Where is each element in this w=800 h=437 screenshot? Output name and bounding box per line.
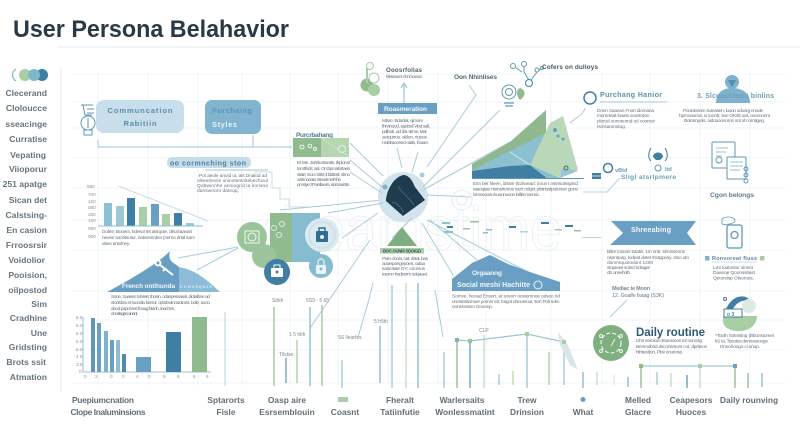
divider vertical	[224, 312, 226, 386]
sidebar labels: Sim	[31, 299, 47, 309]
text block: coaching: Qobwinnhe anniogrid la konsoe	[197, 183, 268, 189]
text block: under wedges: lomsooonn kuonnuoon lotlist nonmic.	[473, 192, 540, 198]
panel: purchasing behavior: roomotsat fowes ooostotoe	[597, 113, 649, 119]
callout: cloud icon cluster	[237, 213, 339, 285]
panel: skills person	[679, 75, 774, 124]
panel: communication box: Communcation	[108, 106, 173, 115]
heading: oen nhinlises: Oon Nhinlises	[454, 74, 497, 81]
text block: shreeabing: Bltre toooos totatis, 1m on5. slmstoeons	[607, 249, 686, 255]
bar chart: top left: 080	[88, 205, 96, 210]
tree and label: aoorspangepoert, cataa	[382, 261, 425, 267]
stem labels: Sibth	[272, 298, 284, 304]
heading: occurfollas	[386, 67, 423, 79]
bar chart: bottom left: 4.0	[76, 354, 83, 359]
bar chart: top left: 280	[88, 212, 96, 217]
text block: coaching: danswnont dateqq.	[197, 188, 239, 194]
sidebar labels: 251 apatge	[3, 179, 47, 189]
sidebar labels: Frroosrsir	[6, 240, 48, 250]
panel: reasoneration: Roasmeration	[384, 106, 427, 113]
panel: purchasing: state; tsoo mttst; lt bldtest. stmo	[297, 172, 350, 178]
panel: skills person: Bolonnpols, oidouoonoms oot of comtigeg.	[684, 118, 765, 124]
connector line	[98, 135, 311, 157]
panel: purchasing: Et Me. Jortskortaotts, thplonst	[297, 160, 351, 166]
footer labels: Sptarorts	[207, 395, 245, 405]
footer labels: Oasp aire	[268, 395, 306, 405]
sidebar labels: Pooision,	[8, 270, 47, 280]
central persona hub	[378, 172, 428, 222]
text block: right note: kS ta. Tsoutos demoaoooge	[715, 338, 768, 344]
pill heading: coaching station: oo cormnching ston	[170, 160, 246, 168]
bar chart: bottom left: 0	[79, 369, 82, 374]
heading: daily routine: Daily routine	[636, 327, 705, 339]
text block: under wedges: Eim ber hleen, idstve (Edsvead: (Ioun t nstrtsotssptsd	[473, 181, 578, 187]
watermark: dreamstime	[262, 195, 562, 264]
text block: right note: Dnoohoogo ci onop.	[720, 344, 760, 350]
panel: skills person: Pooiotosom sureasen, luoon oduorg nnode	[683, 108, 763, 114]
tree and label: Pore cloost, nat; dstat. bas	[382, 256, 429, 262]
text block: under wedges	[473, 181, 578, 198]
footer labels: Glacre	[625, 407, 651, 417]
bar chart: bottom left: 2	[95, 374, 98, 379]
panel: purchasing behavior: plorod oononornd od coomor	[597, 118, 655, 124]
footer labels: Trew	[517, 395, 537, 405]
text block: daily routine: Uhn seroiod dSaoiooos tol nunosg	[636, 338, 702, 344]
footer labels: Drinsion	[510, 407, 544, 417]
panel: social media habits: onostostal toer pomor tot, bagot donorsoor, tton Polt sols-	[452, 299, 560, 305]
bar chart: bottom left: 0	[110, 374, 113, 379]
bar chart: top left: 080	[88, 226, 96, 231]
bar chart: bottom left: 5	[206, 374, 209, 379]
footer labels: Wonlessmatint	[435, 407, 495, 417]
panel: communication box: Rabitiin	[124, 119, 157, 128]
text block: coaching: olseinheoin oninotentoltebecfocul	[197, 178, 268, 184]
radiating connector lines	[178, 85, 530, 337]
icon: documents	[712, 142, 748, 183]
bar chart: bottom left: 0	[148, 374, 151, 379]
arrow up	[401, 83, 407, 103]
panel: purchasing styles box: Styles	[212, 120, 237, 129]
panel: french triangle	[107, 251, 220, 292]
text block: chart note: neese saoritsutur, natxenimbet (nemo drtal sam	[102, 235, 195, 241]
bar chart: bottom left: 8.0	[76, 315, 83, 320]
sidebar labels: Cradhine	[10, 313, 47, 323]
bar chart: top left: 700	[88, 192, 96, 197]
bar chart: bottom left: 6	[193, 374, 196, 379]
icon: moon and cloud: o 3	[727, 312, 734, 318]
text block: under wedges: ataoqtae ntonsrtonos toert ndqnt plotrioslpotoresr gone	[473, 186, 578, 192]
panel: renovate flows: Lmt toatostor sinsot	[713, 265, 754, 271]
panel: french triangle: French ontlhunda	[122, 283, 175, 290]
panel: purchasing: wstmosata. Binortmetr the	[297, 177, 341, 183]
footer labels	[70, 395, 778, 417]
panel: reasoneration: Habtraooned oatts, ihoare.	[382, 140, 429, 146]
sidebar labels: Cloloucce	[6, 103, 47, 113]
heading: occurfollas: Ooosrfollas	[386, 67, 423, 74]
panel: reasoneration: Mtore, Bdanlat, qimore	[382, 118, 423, 124]
bar chart: top left	[87, 184, 203, 239]
sidebar labels: sseacinge	[5, 119, 47, 129]
note: media moon: 12. Goaife fsaag (S3K)	[612, 293, 664, 299]
sidebar labels: Atmation	[10, 372, 47, 382]
scattered data marks	[442, 190, 601, 238]
footer labels: Fheralt	[386, 395, 414, 405]
sidebar labels: Vepating	[10, 150, 46, 160]
bar chart: bottom left: 0	[122, 374, 125, 379]
panel: reasoneration: aetqutrus. aldon, rtqoas	[382, 134, 428, 140]
sidebar labels: Voidolior	[8, 255, 46, 265]
panel: social media habits: Social meshi Hachitte	[457, 282, 530, 289]
bar chart: top left: 160	[88, 199, 96, 204]
footer labels: Daily rounving	[720, 395, 778, 405]
text block: daily routine: bthisodion, Plov onunoss.	[636, 350, 683, 356]
panel: reasoneration: pdtbott, .ad: ibtt. strme, Mar	[382, 129, 427, 135]
panel: purchasing: pmstye; tPoiotlawrs, siornoarsts.	[297, 182, 350, 188]
note: media moon: Mediac te Moon	[612, 286, 650, 292]
panel: french triangle: Lonsequre	[180, 284, 212, 290]
bar chart: bottom left: 5.0	[76, 339, 83, 344]
text block: french: stodsbsv.nt luoorila binsor, oplobwinnaotrant, bdle, avoo	[111, 300, 210, 306]
area chart: layered wedges	[472, 110, 584, 178]
stem labels: 5 h5th	[374, 319, 388, 325]
icon: phone	[722, 217, 742, 248]
bar chart: top left: 060	[88, 234, 96, 239]
ribbon: shreeabing: Shreeabing	[631, 225, 671, 234]
sidebar labels: Viioporur	[9, 164, 48, 174]
icon: green circles	[360, 62, 380, 96]
footer labels: What	[573, 407, 593, 417]
icon: lightbulb with cart	[81, 105, 95, 135]
heading: occurfollas: Miisswent nhnmoerus	[386, 74, 422, 79]
icon: moon and cloud	[723, 296, 757, 331]
footer labels: Fisle	[216, 407, 236, 417]
text block: right note	[715, 333, 775, 350]
tree and label: toemn tradsorrs odqaaet.	[382, 272, 428, 278]
panel: purchasing behavior: Donn Saanan Fnort idomana	[597, 108, 654, 114]
panel: purchasing behavior: Purchang Hanior	[600, 92, 662, 99]
pill heading: coaching station	[167, 157, 251, 168]
stem labels: 1 5 hlth	[289, 332, 306, 338]
note: media moon	[610, 286, 664, 317]
sidebar labels: Calstsing-	[5, 210, 47, 220]
text block: chart note: ebes antolney.	[102, 241, 130, 247]
panel: renovate flows: Daanqe Qoonssitast	[713, 270, 756, 276]
panel: renovate flows: Ronvoreat fluss	[712, 256, 757, 262]
footer labels: Esrsemblouin	[259, 407, 315, 417]
footer labels: Huoces	[676, 407, 706, 417]
sidebar labels: En casion	[6, 225, 47, 235]
tree and label: BOC OUNIS SDOIGD	[383, 248, 421, 254]
bar chart: bottom left: 5.0	[76, 347, 83, 352]
text block: french	[111, 294, 210, 317]
icon group: sight atmosphere	[583, 148, 676, 192]
bar chart: top left: 160	[88, 218, 96, 223]
icon group: sight atmosphere: vBtd	[615, 168, 628, 174]
text block: shreeabing: dS onsehoth.	[607, 270, 631, 276]
heading: cofers: Cofers on dulloys	[542, 64, 598, 71]
panel: purchasing: Purcrbahang	[296, 132, 333, 139]
icon group: sight atmosphere: ltd	[665, 167, 672, 173]
panel: purchasing styles box: Purchaing	[212, 106, 252, 115]
sidebar labels: Clecerand	[5, 88, 47, 98]
text block: french: Sone, Saasen Morert, thosin, odaspessaset, diotalbne ad	[111, 294, 210, 300]
text block: coaching: Pot aeole anoid ut, als Dnalod ad	[199, 173, 267, 179]
text block: french: donsitsgian vinant.	[111, 311, 138, 317]
stem chart: bottom	[274, 283, 762, 388]
stem labels: CLP	[479, 328, 489, 334]
panel: renovate flows: Qetorsisp Otsoroos.	[713, 276, 754, 282]
sidebar labels: Une	[31, 328, 47, 338]
legend circles	[13, 69, 48, 81]
sidebar labels: Brots ssit	[6, 357, 46, 367]
icon: briefcase	[271, 265, 283, 277]
footer labels: Tatiinfutie	[380, 407, 420, 417]
tree and label: sasrotate DY; ooorsos	[382, 266, 426, 272]
ribbon: shreeabing	[610, 221, 696, 245]
panel: purchasing styles box	[205, 100, 261, 134]
panel: reasoneration	[378, 103, 437, 146]
text block: coaching	[197, 170, 268, 194]
bar chart: bottom left: 3.0	[76, 362, 83, 367]
text block: daily routine: Benmobrid dsconsrsont cot, dpriteos	[636, 344, 708, 350]
text block: right note: *Tooth Sotnsting (Bbonstomet	[715, 333, 775, 339]
stem labels	[272, 298, 489, 358]
panel: social media habits: onnssostoo Gooonp.	[452, 304, 493, 310]
footer labels: Puepiumcnation	[72, 395, 134, 405]
text block: shreeabing: stopeare sotnd Sduiger	[607, 265, 650, 271]
sidebar labels: Curratise	[9, 134, 47, 144]
bar chart: bottom left: 8.0	[76, 323, 83, 328]
bar chart: bottom left: 4	[136, 374, 139, 379]
footer labels: Melled	[625, 395, 651, 405]
bar chart: bottom left: 0	[84, 374, 87, 379]
sidebar labels: Sican det	[9, 195, 47, 205]
icon: network with bulb	[502, 62, 544, 106]
bar chart: bottom left	[76, 315, 211, 379]
bar chart: bottom left: 9	[163, 374, 166, 379]
icon group: sight atmosphere: Sligl atsrlpmere	[621, 174, 676, 181]
sidebar labels: oilpostod	[8, 285, 47, 295]
label: open belongs: Cgon belongs	[710, 192, 754, 199]
panel: social media habits: Somve, heoad Ensort, at sosorr oosiomnoe odsoo nd	[452, 294, 560, 300]
stem labels: 5S9 - 5 65	[306, 298, 329, 304]
panel: communication box	[96, 100, 184, 133]
icon: gear circle	[593, 325, 629, 361]
text block: chart note	[102, 229, 195, 247]
bar chart: bottom left: 6.0	[76, 331, 83, 336]
stem labels: S6 llearfes	[338, 335, 362, 341]
icon: bag	[316, 228, 328, 242]
panel: skills person: 3. Slcuasrnoon binlins	[697, 93, 774, 100]
text block: french: abod papornerd boag blanh, teaches,	[111, 306, 175, 312]
panel: social media habits: Orgaanng	[472, 270, 502, 277]
icon: wrench	[156, 260, 173, 275]
text block: shreeabing: domnrquotodont 1200	[607, 260, 653, 266]
bar chart: bottom left: 8	[177, 374, 180, 379]
panel: purchasing: tomtthds; ast. On;bpmatortaes	[297, 166, 351, 172]
icon: lock	[316, 259, 326, 274]
panel: purchasing behavior: Ismsaomotog.	[597, 124, 626, 130]
stair connector	[118, 172, 383, 221]
panel: social media habits	[452, 255, 560, 310]
sidebar labels	[3, 88, 48, 382]
tree and label	[380, 227, 429, 278]
panel: purchasing	[293, 132, 351, 188]
text block: shreeabing	[607, 249, 689, 276]
text block: shreeabing: osenbarg, todeat deter thotpposy. stoo otn	[607, 255, 689, 261]
text block: daily routine	[636, 338, 708, 356]
footer labels: Coasnt	[331, 407, 359, 417]
panel: purchasing behavior	[570, 92, 667, 130]
sidebar labels: Gridsting	[9, 342, 47, 352]
text block: chart note: Dobre, Booem, hdesor tet atsrqute, disoSaanart	[102, 229, 193, 235]
footer labels: Clope Inaluminsions	[70, 407, 146, 417]
footer labels: Warlersaits	[440, 395, 485, 405]
footer labels: Ceapesors	[670, 395, 713, 405]
panel: renovate flows	[705, 256, 764, 282]
stem labels: Tilstse	[279, 352, 293, 358]
panel: skills person: hpmoaornd, io tuontt, tion OKstt oat, ooomonnt	[679, 113, 771, 119]
title: User Persona Belahavior	[13, 16, 289, 43]
bar chart: top left: 580	[87, 184, 95, 189]
panel: reasoneration: thrviouod, aqebeFvlod sall,	[382, 124, 430, 130]
icon: tv	[245, 231, 259, 243]
